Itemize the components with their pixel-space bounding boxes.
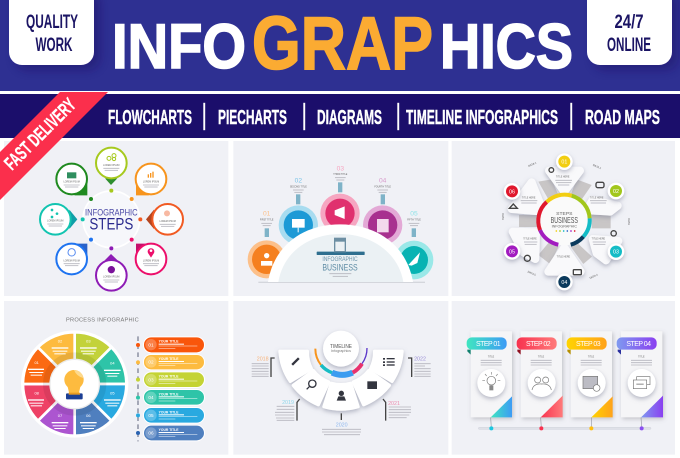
row 06: 06 bbox=[148, 431, 154, 436]
icon: light bulb bbox=[64, 370, 84, 399]
row 06: YOUR TITLE bbox=[159, 428, 179, 432]
petal captions: TITLE HERE bbox=[592, 238, 605, 240]
label 2022: 2022 bbox=[414, 356, 426, 362]
card step 03: STEP 03 bbox=[576, 341, 601, 348]
central dome: INFOGRAPHIC bbox=[322, 256, 358, 263]
wedge labels: 07 bbox=[58, 413, 63, 418]
center text: INFOGRAPHIC bbox=[552, 224, 577, 228]
badge: 24/7 online: ONLINE bbox=[607, 35, 651, 56]
central dome: BUSINESS bbox=[322, 262, 358, 272]
card step 01: TITLE bbox=[488, 356, 495, 358]
card step 02 bbox=[517, 331, 563, 417]
number badges bbox=[504, 153, 624, 290]
step 02 blue: 02 bbox=[295, 178, 302, 185]
row 01: 01 bbox=[148, 342, 154, 347]
data labels: DATA bbox=[627, 218, 631, 225]
panel: steps business bbox=[452, 141, 675, 296]
badge: quality work bbox=[9, 0, 100, 70]
step 05 teal bbox=[395, 211, 433, 279]
central dome bbox=[268, 224, 413, 282]
data labels: DATA 1 bbox=[527, 160, 538, 168]
number badges: 06 bbox=[509, 189, 515, 195]
step 05 teal: FIFTH TITLE bbox=[407, 219, 421, 221]
fast delivery ribbon: FAST DELIVERY bbox=[1, 95, 81, 175]
step: left teal: LOREM IPSUM bbox=[47, 221, 64, 223]
fan cards bbox=[280, 351, 402, 409]
number badges: 01 bbox=[561, 160, 567, 166]
center text: STEPS bbox=[556, 211, 573, 217]
step: lower right pink: LOREM IPSUM bbox=[143, 260, 159, 262]
row 04: 04 bbox=[148, 395, 154, 400]
navigation labels: TIMELINE INFOGRAPHICS bbox=[406, 107, 558, 129]
step: bottom purple: LOREM IPSUM bbox=[103, 277, 120, 279]
title: INFO bbox=[112, 12, 246, 82]
badge: 24/7 online: 24/7 bbox=[614, 12, 644, 33]
petal captions bbox=[521, 177, 607, 259]
center ring and title: INFOGRAPHIC bbox=[85, 208, 138, 218]
center text bbox=[551, 211, 578, 232]
label 2018 bbox=[252, 356, 275, 377]
ring dots bbox=[81, 189, 142, 250]
row 05 bbox=[136, 408, 204, 423]
badge: quality work: QUALITY bbox=[26, 12, 78, 33]
row 03: 03 bbox=[148, 377, 154, 382]
wedge labels: 05 bbox=[110, 391, 115, 396]
navigation band bbox=[0, 91, 680, 138]
navigation labels: DIAGRAMS bbox=[317, 107, 382, 129]
step 01 orange: 01 bbox=[263, 211, 271, 218]
row 04: YOUR TITLE bbox=[159, 392, 179, 396]
step: upper left green: LOREM IPSUM bbox=[64, 182, 80, 184]
row 01: YOUR TITLE bbox=[159, 340, 179, 344]
row 04 bbox=[136, 390, 204, 405]
petal captions: TITLE HERE bbox=[557, 257, 570, 259]
step 01 orange: FIRST TITLE bbox=[260, 219, 274, 221]
icons bbox=[291, 357, 395, 401]
wheel chart bbox=[21, 330, 128, 438]
grey spokes bbox=[519, 179, 611, 264]
colored arc bbox=[315, 348, 367, 375]
fast delivery ribbon bbox=[0, 92, 108, 200]
row 01 bbox=[136, 337, 204, 352]
step 04 purple bbox=[363, 178, 402, 245]
wedge labels bbox=[28, 338, 121, 429]
badge: 24/7 online bbox=[587, 0, 678, 70]
timeline axis bbox=[478, 417, 651, 430]
data labels: DATA 4 bbox=[589, 272, 599, 280]
panel: infographic business bbox=[233, 141, 448, 296]
number badges: 05 bbox=[509, 249, 515, 255]
step 03 pink: THIRD TITLE bbox=[333, 174, 348, 176]
label 2019 bbox=[275, 399, 300, 421]
pills list bbox=[136, 336, 205, 441]
row 03: YOUR TITLE bbox=[159, 375, 179, 379]
step: lower left blue bbox=[56, 244, 87, 274]
card step 04: TITLE bbox=[638, 356, 645, 358]
step 02 blue: SECOND TITLE bbox=[290, 186, 307, 188]
petal captions: TITLE HERE bbox=[556, 177, 570, 179]
row 05: 05 bbox=[148, 413, 154, 418]
step: top lime bbox=[96, 148, 127, 185]
number badges: 03 bbox=[613, 250, 619, 256]
panel: process infographic bbox=[4, 301, 228, 455]
card step 04 bbox=[617, 331, 663, 417]
row 06 bbox=[136, 426, 204, 440]
row 02: 02 bbox=[148, 360, 154, 365]
row 02 bbox=[136, 355, 204, 369]
center text: BUSINESS bbox=[551, 216, 578, 225]
step: top lime: LOREM IPSUM bbox=[103, 165, 120, 167]
label 2022 bbox=[408, 356, 431, 377]
label 2021: 2021 bbox=[388, 401, 400, 407]
card step 01 bbox=[467, 331, 512, 417]
data labels bbox=[501, 160, 631, 280]
header background bbox=[0, 0, 680, 91]
step: upper right orange bbox=[136, 164, 166, 195]
center ring and title: STEPS bbox=[89, 215, 133, 234]
card step 03 bbox=[567, 331, 613, 417]
center circle bbox=[323, 331, 359, 367]
card step 02: STEP 02 bbox=[526, 341, 551, 348]
small icons bbox=[509, 168, 616, 275]
center ring and title bbox=[83, 191, 140, 248]
data labels: DATA bbox=[501, 213, 505, 220]
navigation labels: PIECHARTS bbox=[218, 107, 287, 129]
step: right red orange bbox=[146, 204, 183, 235]
number badges: 04 bbox=[561, 280, 567, 286]
step 01 orange bbox=[248, 211, 286, 278]
number badges: 02 bbox=[613, 189, 619, 195]
data labels: DATA 5 bbox=[527, 270, 537, 277]
data labels: DATA 2 bbox=[592, 163, 602, 170]
label 2020: 2020 bbox=[336, 422, 348, 428]
step 05 teal: 05 bbox=[410, 211, 418, 218]
label 2021 bbox=[383, 399, 411, 421]
card step 03: TITLE bbox=[588, 356, 595, 358]
step 03 pink bbox=[320, 166, 360, 233]
heading: PROCESS INFOGRAPHIC bbox=[66, 317, 139, 323]
step 04 purple: FOURTH TITLE bbox=[374, 186, 391, 188]
petal captions: TITLE HERE bbox=[522, 197, 536, 199]
step 04 purple: 04 bbox=[379, 178, 387, 185]
center circle: TIMELINE bbox=[330, 344, 352, 350]
petal captions: TITLE HERE bbox=[590, 197, 604, 199]
title: HICS bbox=[440, 12, 573, 82]
panel: timeline bbox=[233, 301, 448, 455]
navigation labels: FLOWCHARTS bbox=[108, 107, 192, 129]
badge: quality work: WORK bbox=[36, 35, 73, 56]
wedge labels: 03 bbox=[86, 338, 91, 343]
step 02 blue bbox=[279, 178, 318, 245]
step: lower right pink bbox=[136, 244, 166, 274]
step 03 pink: 03 bbox=[337, 166, 344, 173]
base shadow bbox=[258, 282, 425, 283]
petal captions: TITLE HERE bbox=[523, 238, 537, 240]
title: GRAP bbox=[252, 1, 433, 85]
center circle: Infographics bbox=[331, 349, 351, 353]
title bbox=[112, 1, 573, 85]
label 2020 bbox=[322, 413, 361, 435]
row 02: YOUR TITLE bbox=[159, 357, 179, 361]
wedge labels: 02 bbox=[58, 338, 63, 343]
wedge labels: 06 bbox=[86, 413, 91, 418]
step: left teal bbox=[40, 204, 77, 235]
wedge labels: 08 bbox=[34, 391, 40, 396]
label 2018: 2018 bbox=[257, 356, 269, 362]
step: lower left blue: LOREM IPSUM bbox=[64, 260, 80, 262]
panel: step cards bbox=[452, 301, 675, 455]
petals bbox=[512, 171, 618, 272]
wedge labels: 01 bbox=[34, 360, 40, 365]
card step 01: STEP 01 bbox=[476, 341, 501, 348]
step: upper right orange: LOREM IPSUM bbox=[143, 182, 159, 184]
step: upper left green bbox=[56, 164, 87, 195]
label 2019: 2019 bbox=[282, 400, 294, 406]
card step 02: TITLE bbox=[538, 356, 545, 358]
row 03 bbox=[136, 372, 204, 387]
row 05: YOUR TITLE bbox=[159, 410, 179, 414]
central ring bbox=[538, 195, 590, 245]
card step 04: STEP 04 bbox=[626, 341, 651, 348]
panel: infographic steps bbox=[4, 141, 228, 296]
wedge labels: 04 bbox=[110, 361, 115, 366]
navigation labels bbox=[108, 103, 660, 130]
step: bottom purple bbox=[96, 254, 127, 291]
step: right red orange: LOREM IPSUM bbox=[160, 221, 176, 223]
